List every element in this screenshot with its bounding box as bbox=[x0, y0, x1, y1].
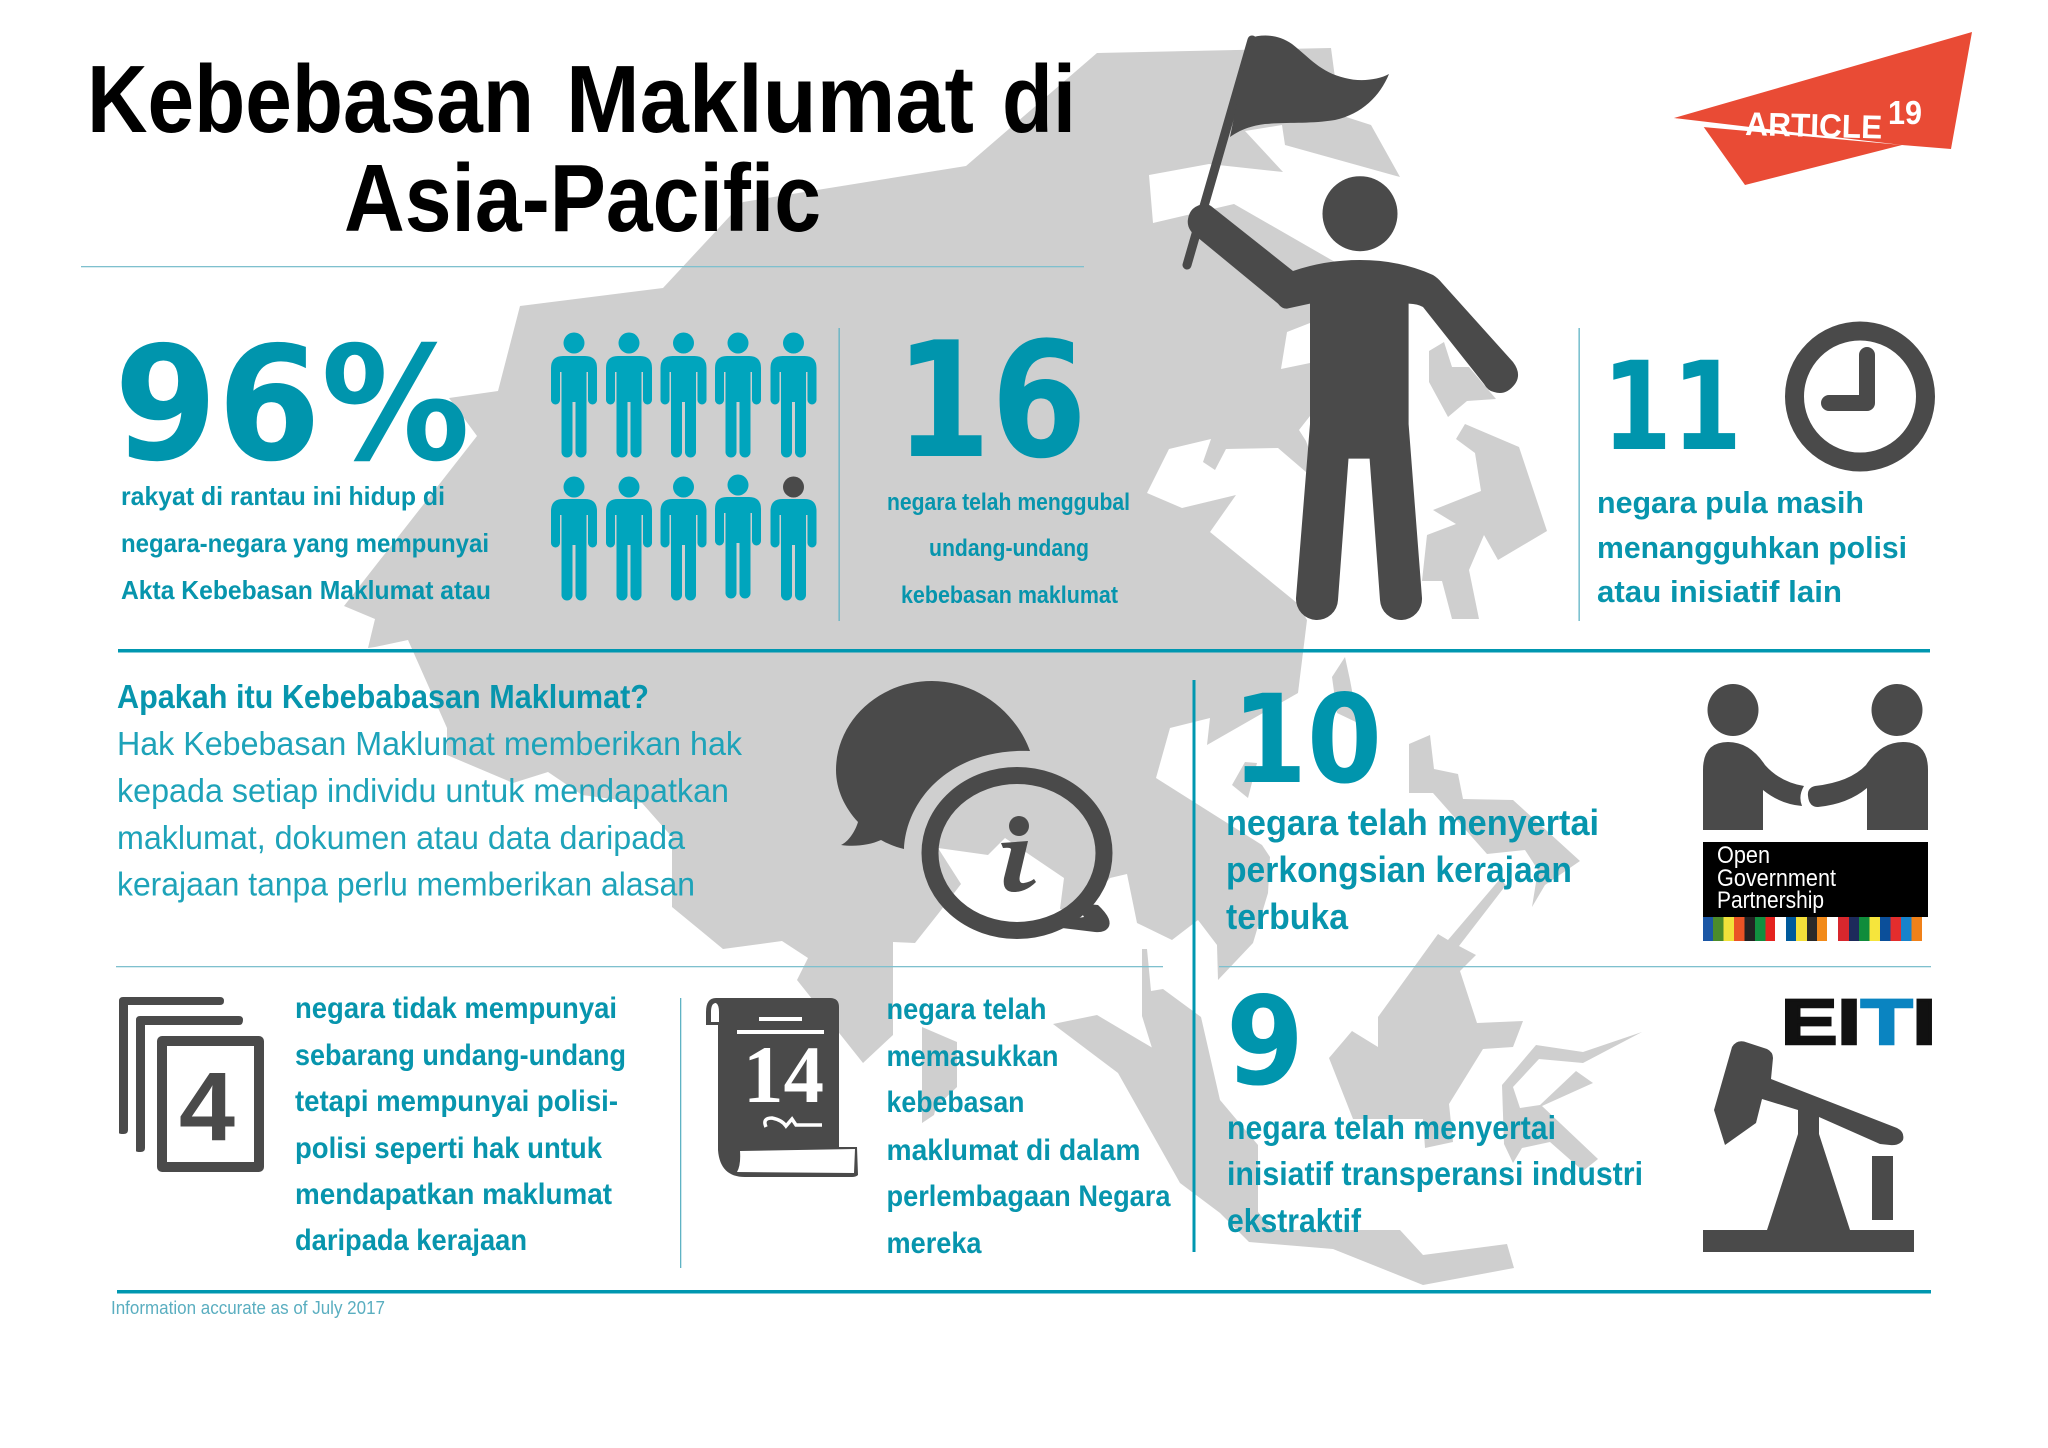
stat: 11: menangguhkan polisi bbox=[1597, 530, 1907, 565]
stat: 11: atau inisiatif lain bbox=[1597, 574, 1842, 609]
text: 4 countries: daripada kerajaan bbox=[295, 1224, 527, 1257]
icon: stack of documents with 4: 4 bbox=[179, 1052, 235, 1161]
stat: 16: kebebasan maklumat bbox=[901, 582, 1118, 609]
stat: 10: terbuka bbox=[1226, 896, 1349, 937]
stat: 10: 10 bbox=[1232, 669, 1382, 811]
text: 14 countries: negara telah bbox=[886, 993, 1046, 1026]
footnote: Information accurate as of July 2017 bbox=[111, 1297, 385, 1318]
icon: constitution scroll with 14 bbox=[706, 998, 858, 1177]
logo: Open Government Partnership: Open bbox=[1717, 842, 1770, 869]
icon: constitution scroll with 14: 14 bbox=[743, 1029, 824, 1120]
stat: 9: 9 bbox=[1226, 971, 1304, 1113]
text: what is freedom of information: kepada setiap individu untuk mendapatkan bbox=[117, 772, 729, 809]
icon: speech bubbles with info bbox=[836, 681, 1110, 932]
stat: 11: negara pula masih bbox=[1597, 485, 1864, 520]
title: Asia-Pacific bbox=[344, 145, 821, 252]
stat: 96%: negara-negara yang mempunyai bbox=[121, 528, 489, 558]
text: what is freedom of information: kerajaan tanpa perlu memberikan alasan bbox=[117, 866, 695, 902]
title bbox=[87, 46, 1076, 252]
text: 4 countries: mendapatkan maklumat bbox=[295, 1178, 612, 1211]
text: 4 countries bbox=[295, 992, 626, 1257]
stat: 96%: 96% bbox=[114, 313, 470, 497]
stat: 10: perkongsian kerajaan bbox=[1226, 849, 1572, 890]
title: Kebebasan bbox=[87, 46, 534, 153]
title: Maklumat bbox=[566, 46, 974, 153]
stat: 96%: rakyat di rantau ini hidup di bbox=[121, 481, 445, 511]
stat: 11: 11 bbox=[1602, 336, 1742, 478]
logo: Open Government Partnership bbox=[1703, 842, 1928, 941]
text: what is freedom of information: Apakah itu Kebebabasan Maklumat? bbox=[117, 678, 649, 715]
stat: 16: 16 bbox=[895, 307, 1087, 494]
text: 14 countries: maklumat di dalam bbox=[886, 1134, 1140, 1167]
stat: 96% bbox=[114, 313, 491, 605]
icon: oil pump bbox=[1703, 1041, 1914, 1252]
stat: 16: negara telah menggubal bbox=[887, 489, 1130, 516]
text: 4 countries: sebarang undang-undang bbox=[295, 1039, 626, 1072]
stat: 96%: Akta Kebebasan Maklumat atau bbox=[121, 575, 491, 605]
stat: 16 bbox=[887, 307, 1130, 609]
text: 4 countries: negara tidak mempunyai bbox=[295, 992, 617, 1025]
text: 14 countries: kebebasan bbox=[886, 1086, 1024, 1119]
map: Asia-Pacific background bbox=[344, 48, 1642, 1285]
text: 14 countries bbox=[886, 993, 1171, 1260]
illustration: person holding flag bbox=[1187, 36, 1518, 620]
logo: Article 19 bbox=[1674, 32, 1972, 185]
icon: clock bbox=[1794, 331, 1926, 462]
text: 4 countries: tetapi mempunyai polisi- bbox=[295, 1085, 618, 1118]
icon: handshake bbox=[1703, 684, 1928, 830]
stat: 9 bbox=[1226, 971, 1643, 1239]
text: what is freedom of information bbox=[117, 678, 742, 902]
logo: Open Government Partnership: Government bbox=[1717, 865, 1836, 892]
stat: 10: negara telah menyertai bbox=[1226, 802, 1599, 843]
text: 14 countries: mereka bbox=[886, 1227, 982, 1260]
logo: Article 19: 19 bbox=[1888, 94, 1922, 131]
icon: stack of documents with 4 bbox=[119, 997, 259, 1167]
stat: 16: undang-undang bbox=[929, 535, 1089, 562]
text: 4 countries: polisi seperti hak untuk bbox=[295, 1132, 602, 1165]
text: 14 countries: memasukkan bbox=[886, 1040, 1058, 1073]
stat: 10 bbox=[1226, 669, 1599, 937]
icon: ten people pictogram bbox=[551, 332, 816, 600]
title: di bbox=[1002, 46, 1076, 153]
logo: Open Government Partnership: Partnership bbox=[1717, 887, 1824, 914]
logo: EITI: EI TI bbox=[1781, 986, 1936, 1058]
text: 14 countries: perlembagaan Negara bbox=[886, 1180, 1171, 1213]
stat: 9: ekstraktif bbox=[1227, 1202, 1362, 1239]
stat: 9: inisiatif transperansi industri bbox=[1227, 1155, 1643, 1192]
stat: 9: negara telah menyertai bbox=[1227, 1109, 1556, 1146]
text: what is freedom of information: Hak Kebebasan Maklumat memberikan hak bbox=[117, 725, 742, 762]
stat: 11 bbox=[1597, 336, 1907, 609]
logo: Article 19: ARTICLE bbox=[1745, 105, 1883, 146]
text: what is freedom of information: maklumat, dokumen atau data daripada bbox=[117, 819, 686, 856]
